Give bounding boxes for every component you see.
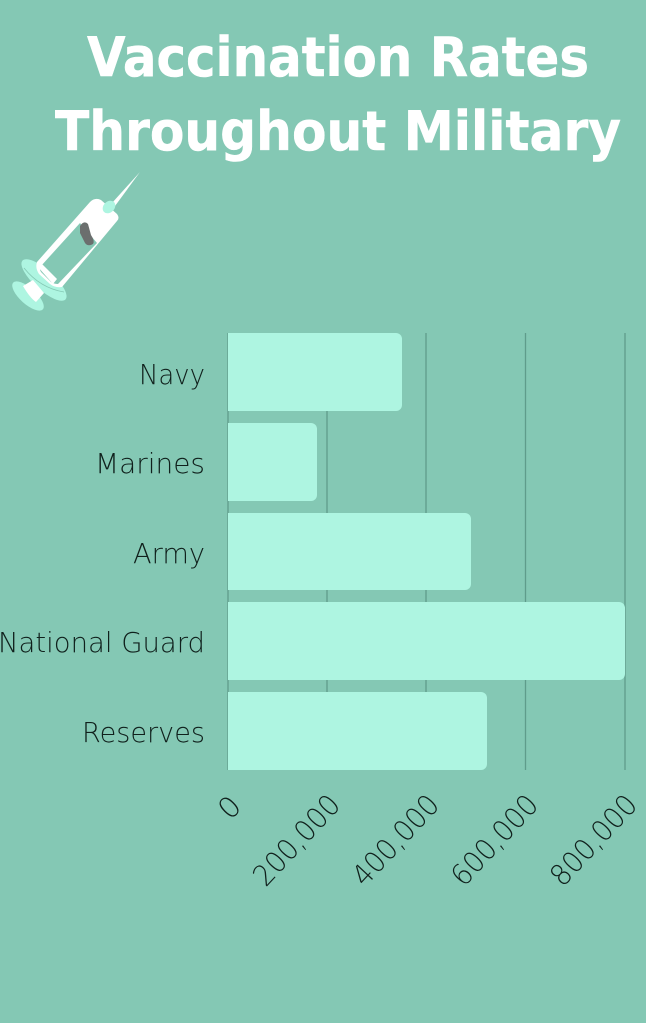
- category labels: Navy: [139, 358, 205, 391]
- title: [55, 26, 621, 163]
- bar chart: [0, 333, 644, 893]
- category labels: Marines: [95, 447, 205, 480]
- grid lines: [228, 333, 625, 770]
- barrel: [36, 199, 119, 287]
- category labels: National Guard: [0, 626, 205, 659]
- flange: [16, 253, 72, 307]
- axis labels: 200,000: [246, 788, 347, 893]
- title: Throughout Military: [55, 100, 621, 163]
- category labels: [0, 358, 205, 749]
- needle: [112, 172, 140, 206]
- liquid mark: [80, 222, 94, 245]
- category labels: Army: [133, 537, 205, 570]
- axis labels: 400,000: [345, 788, 446, 893]
- axis labels: 0: [211, 789, 248, 826]
- axis labels: 600,000: [444, 788, 545, 893]
- category labels: Reserves: [82, 716, 205, 749]
- end disc: [8, 277, 48, 315]
- icon: syringe: [8, 172, 140, 315]
- barrel window: [40, 223, 97, 284]
- axis labels: [211, 788, 644, 893]
- bars: [228, 333, 625, 770]
- hub: [100, 198, 118, 216]
- plunger: [23, 280, 44, 302]
- bottom band of barrel: [38, 264, 57, 284]
- title: Vaccination Rates: [87, 26, 589, 89]
